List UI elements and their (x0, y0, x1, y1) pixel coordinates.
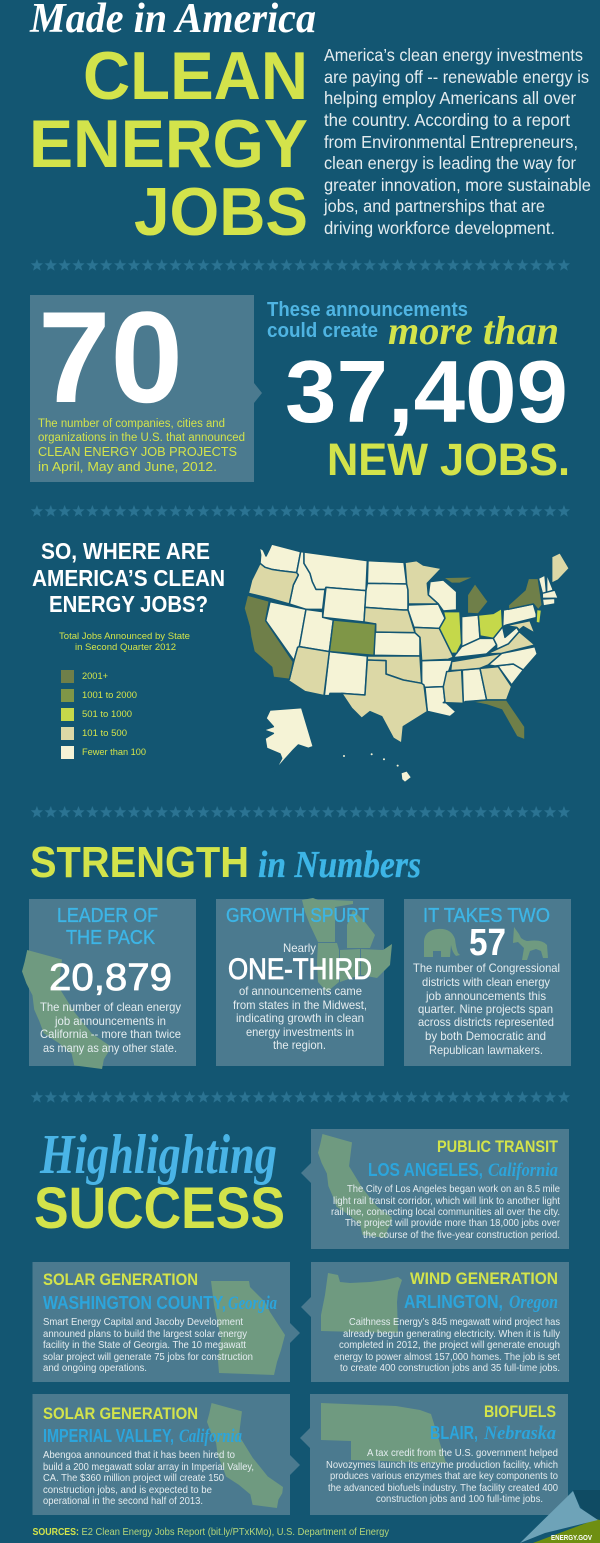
panel text: the course of the five-year construction period. (363, 1229, 560, 1241)
category label: SOLAR GENERATION (43, 1405, 198, 1423)
location: LOS ANGELES, (368, 1160, 483, 1180)
number 20,879: 20,879 (49, 957, 172, 999)
heading: Clean Energy Jobs (29, 38, 308, 250)
heading: Highlighting Success (34, 1124, 285, 1241)
panel heading (57, 905, 158, 949)
panel: 70 announcements (30, 284, 262, 482)
heading: Clean Energy Jobs: JOBS (134, 174, 308, 250)
panel text: The project will provide more than 18,000 jobs over (345, 1217, 560, 1229)
location (404, 1292, 558, 1313)
heading: where are the jobs: SO, WHERE ARE (41, 538, 210, 564)
panel text (40, 1000, 181, 1055)
intro text block (323, 45, 591, 238)
legend title: Total Jobs Announced by State (59, 631, 190, 642)
icon: elephant (424, 929, 460, 957)
location: California (488, 1160, 558, 1181)
number 57: 57 (469, 922, 506, 964)
heading: Clean Energy Jobs: CLEAN (83, 38, 308, 114)
panel text: of announcements came (239, 984, 362, 998)
panel text: The number of clean energy (40, 1000, 181, 1014)
panel heading: THE PACK (66, 927, 156, 949)
category label: WIND GENERATION (410, 1270, 558, 1288)
text: these announcements could create (267, 299, 468, 342)
heading: where are the jobs: AMERICA’S CLEAN (32, 565, 225, 591)
panel text: California -- more than twice (40, 1027, 181, 1041)
panel: biofuels, Blair (300, 1394, 568, 1515)
panel text (331, 1183, 560, 1241)
panel: wind generation, Arlington (301, 1262, 569, 1382)
big number 70: 70 (38, 284, 183, 430)
caption for 70: organizations in the U.S. that announced (38, 432, 245, 444)
figure: one-third: ONE-THIRD (228, 953, 372, 986)
icon: Midwest silhouette (302, 898, 392, 992)
heading: where are the jobs (32, 538, 225, 617)
heading: Strength in Numbers: in Numbers (258, 844, 421, 886)
panel text: the region. (273, 1038, 326, 1052)
panel text: energy investments in (246, 1025, 354, 1039)
panel text: construction jobs, and is expected to be (43, 1484, 212, 1496)
panel text (326, 1447, 558, 1505)
panel text (43, 1449, 254, 1507)
icon: California silhouette (22, 950, 109, 1069)
icon: donkey (513, 927, 548, 960)
panel text: completed in 2012, the project will generate enough (339, 1339, 560, 1351)
script: more than: more than (388, 308, 559, 353)
panel text: CA. The $360 million project will create 150 (43, 1472, 224, 1484)
map legend: Fewer than 100 (82, 747, 146, 758)
caption for 70: CLEAN ENERGY JOB PROJECTS (38, 444, 237, 459)
map legend (61, 670, 146, 759)
page curl with Energy.gov mark: ENERGY.GOV (551, 1533, 592, 1542)
panel text: The City of Los Angeles began work on an 8.5 mile (347, 1183, 560, 1195)
panel: growth spurt (216, 898, 392, 1066)
panel: it takes two (404, 899, 571, 1066)
panel text: operational in the second half of 2013. (43, 1495, 203, 1507)
panel text: The number of Congressional (413, 961, 560, 975)
intro text block: are paying off -- renewable energy is (324, 67, 589, 87)
location: WASHINGTON COUNTY, (43, 1293, 226, 1313)
location: Georgia (228, 1293, 277, 1314)
panel text: across districts represented (418, 1015, 554, 1029)
panel heading: LEADER OF (57, 905, 158, 927)
panel text (233, 984, 367, 1052)
caption for 70: The number of companies, cities and (38, 418, 225, 430)
panel text: build a 200 megawatt solar array in Imperial Valley, (43, 1461, 254, 1473)
panel text (334, 1316, 561, 1374)
location: ARLINGTON, (404, 1292, 503, 1312)
panel text: districts with clean energy (422, 975, 550, 989)
panel text: Republican lawmakers. (429, 1043, 543, 1057)
caption for 70 (38, 418, 245, 474)
panel text: and ongoing operations. (43, 1362, 147, 1374)
panel text: job announcements in (54, 1014, 166, 1028)
heading: Strength in Numbers (30, 838, 421, 887)
location (430, 1423, 556, 1444)
panel text: already begun generating electricity. When it is fully (343, 1328, 561, 1340)
heading: Strength in Numbers: STRENGTH (30, 838, 249, 887)
panel text: job announcements this (425, 989, 546, 1003)
panel: solar generation, Imperial Valley (32, 1394, 300, 1515)
panel: leader of the pack (22, 899, 196, 1069)
panel text: Novozymes launch its enzyme production facility, which (326, 1459, 558, 1471)
panel text: produces various enzymes that are key components to (330, 1470, 558, 1482)
map legend: 1001 to 2000 (82, 690, 137, 701)
intro text block: greater innovation, more sustainable (324, 175, 591, 195)
location: Oregon (509, 1292, 558, 1313)
text: new jobs: NEW JOBS. (327, 434, 570, 485)
big number 37,409: 37,409 (285, 342, 568, 441)
panel heading: GROWTH SPURT (226, 905, 369, 927)
intro text block: helping employ Americans all over (324, 88, 576, 108)
panel text: construction jobs and 100 full-time jobs. (376, 1493, 543, 1505)
panel text (413, 961, 560, 1057)
text: these announcements could create: could create (267, 320, 378, 342)
panel text: light rail transit corridor, which will link to another light (333, 1195, 560, 1207)
category label: SOLAR GENERATION (43, 1271, 198, 1289)
panel text: A tax credit from the U.S. government helped (367, 1447, 558, 1459)
text: these announcements could create: These announcements (267, 299, 468, 321)
location: California (179, 1426, 242, 1447)
panel text: from states in the Midwest, (233, 998, 367, 1012)
panel text: energy to power almost 157,000 homes. The job is set (334, 1351, 560, 1363)
panel text: rail line, connecting local communities all over the city. (331, 1206, 560, 1218)
panel: public transit, Los Angeles (301, 1129, 569, 1249)
panel text: solar project will generate 75 jobs for construction (43, 1351, 253, 1363)
panel text: as many as any other state. (43, 1041, 177, 1055)
location: Nebraska (483, 1423, 556, 1444)
panel text (43, 1316, 253, 1374)
panel text: by both Democratic and (425, 1029, 546, 1043)
location: BLAIR, (430, 1423, 478, 1443)
legend title: in Second Quarter 2012 (75, 642, 176, 653)
map legend: 501 to 1000 (82, 709, 132, 720)
intro text block: jobs, and partnerships that are (323, 196, 545, 216)
panel text: indicating growth in clean (236, 1011, 364, 1025)
category label: BIOFUELS (484, 1403, 556, 1421)
intro text block: driving workforce development. (324, 218, 555, 238)
icon: Georgia silhouette (211, 1281, 285, 1375)
icon: Nebraska silhouette (321, 1403, 446, 1463)
caption for 70: in April, May and June, 2012. (38, 459, 217, 474)
panel text: to create 400 construction jobs and 35 full-time jobs. (340, 1362, 560, 1374)
icon: California silhouette (207, 1403, 283, 1508)
panel text: facility in the State of Georgia. The 10 megawatt (43, 1339, 246, 1351)
panel: solar generation, Washington County (32, 1262, 300, 1382)
heading: where are the jobs: ENERGY JOBS? (49, 591, 208, 617)
panel text: Abengoa announced that it has been hired to (43, 1449, 235, 1461)
panel heading: IT TAKES TWO (423, 905, 550, 927)
panel text: announed plans to build the largest solar energy (43, 1328, 248, 1340)
heading: Highlighting Success: SUCCESS (34, 1176, 285, 1241)
sources line: SOURCES: (32, 1526, 79, 1538)
location: IMPERIAL VALLEY, (43, 1426, 174, 1446)
icon: Oregon silhouette (321, 1273, 402, 1333)
panel text: quarter. Nine projects span (418, 1002, 553, 1016)
page curl with Energy.gov mark (520, 1490, 600, 1543)
panel text: Caithness Energy’s 845 megawatt wind project has (349, 1316, 560, 1328)
heading: Clean Energy Jobs: ENERGY (29, 106, 308, 182)
intro text block: from Environmental Entrepreneurs, (324, 132, 578, 152)
heading: Highlighting Success: Highlighting (39, 1124, 277, 1186)
location (368, 1160, 558, 1181)
legend title (59, 631, 190, 653)
label: nearly: Nearly (283, 941, 316, 955)
intro text block: America’s clean energy investments (324, 45, 583, 65)
category label: PUBLIC TRANSIT (437, 1138, 558, 1156)
icon: California silhouette (318, 1134, 392, 1238)
sources line: E2 Clean Energy Jobs Report (bit.ly/PTxKMo), U.S. Department of Energy (82, 1526, 390, 1538)
map legend: 101 to 500 (82, 728, 127, 739)
choropleth map of US states (244, 544, 569, 782)
panel text: Smart Energy Capital and Jacoby Development (43, 1316, 243, 1328)
panel text: the advanced biofuels industry. The facility created 400 (328, 1482, 558, 1494)
map legend: 2001+ (82, 671, 108, 682)
intro text block: clean energy is leading the way for (324, 153, 576, 173)
intro text block: the country. According to a report (324, 110, 570, 130)
